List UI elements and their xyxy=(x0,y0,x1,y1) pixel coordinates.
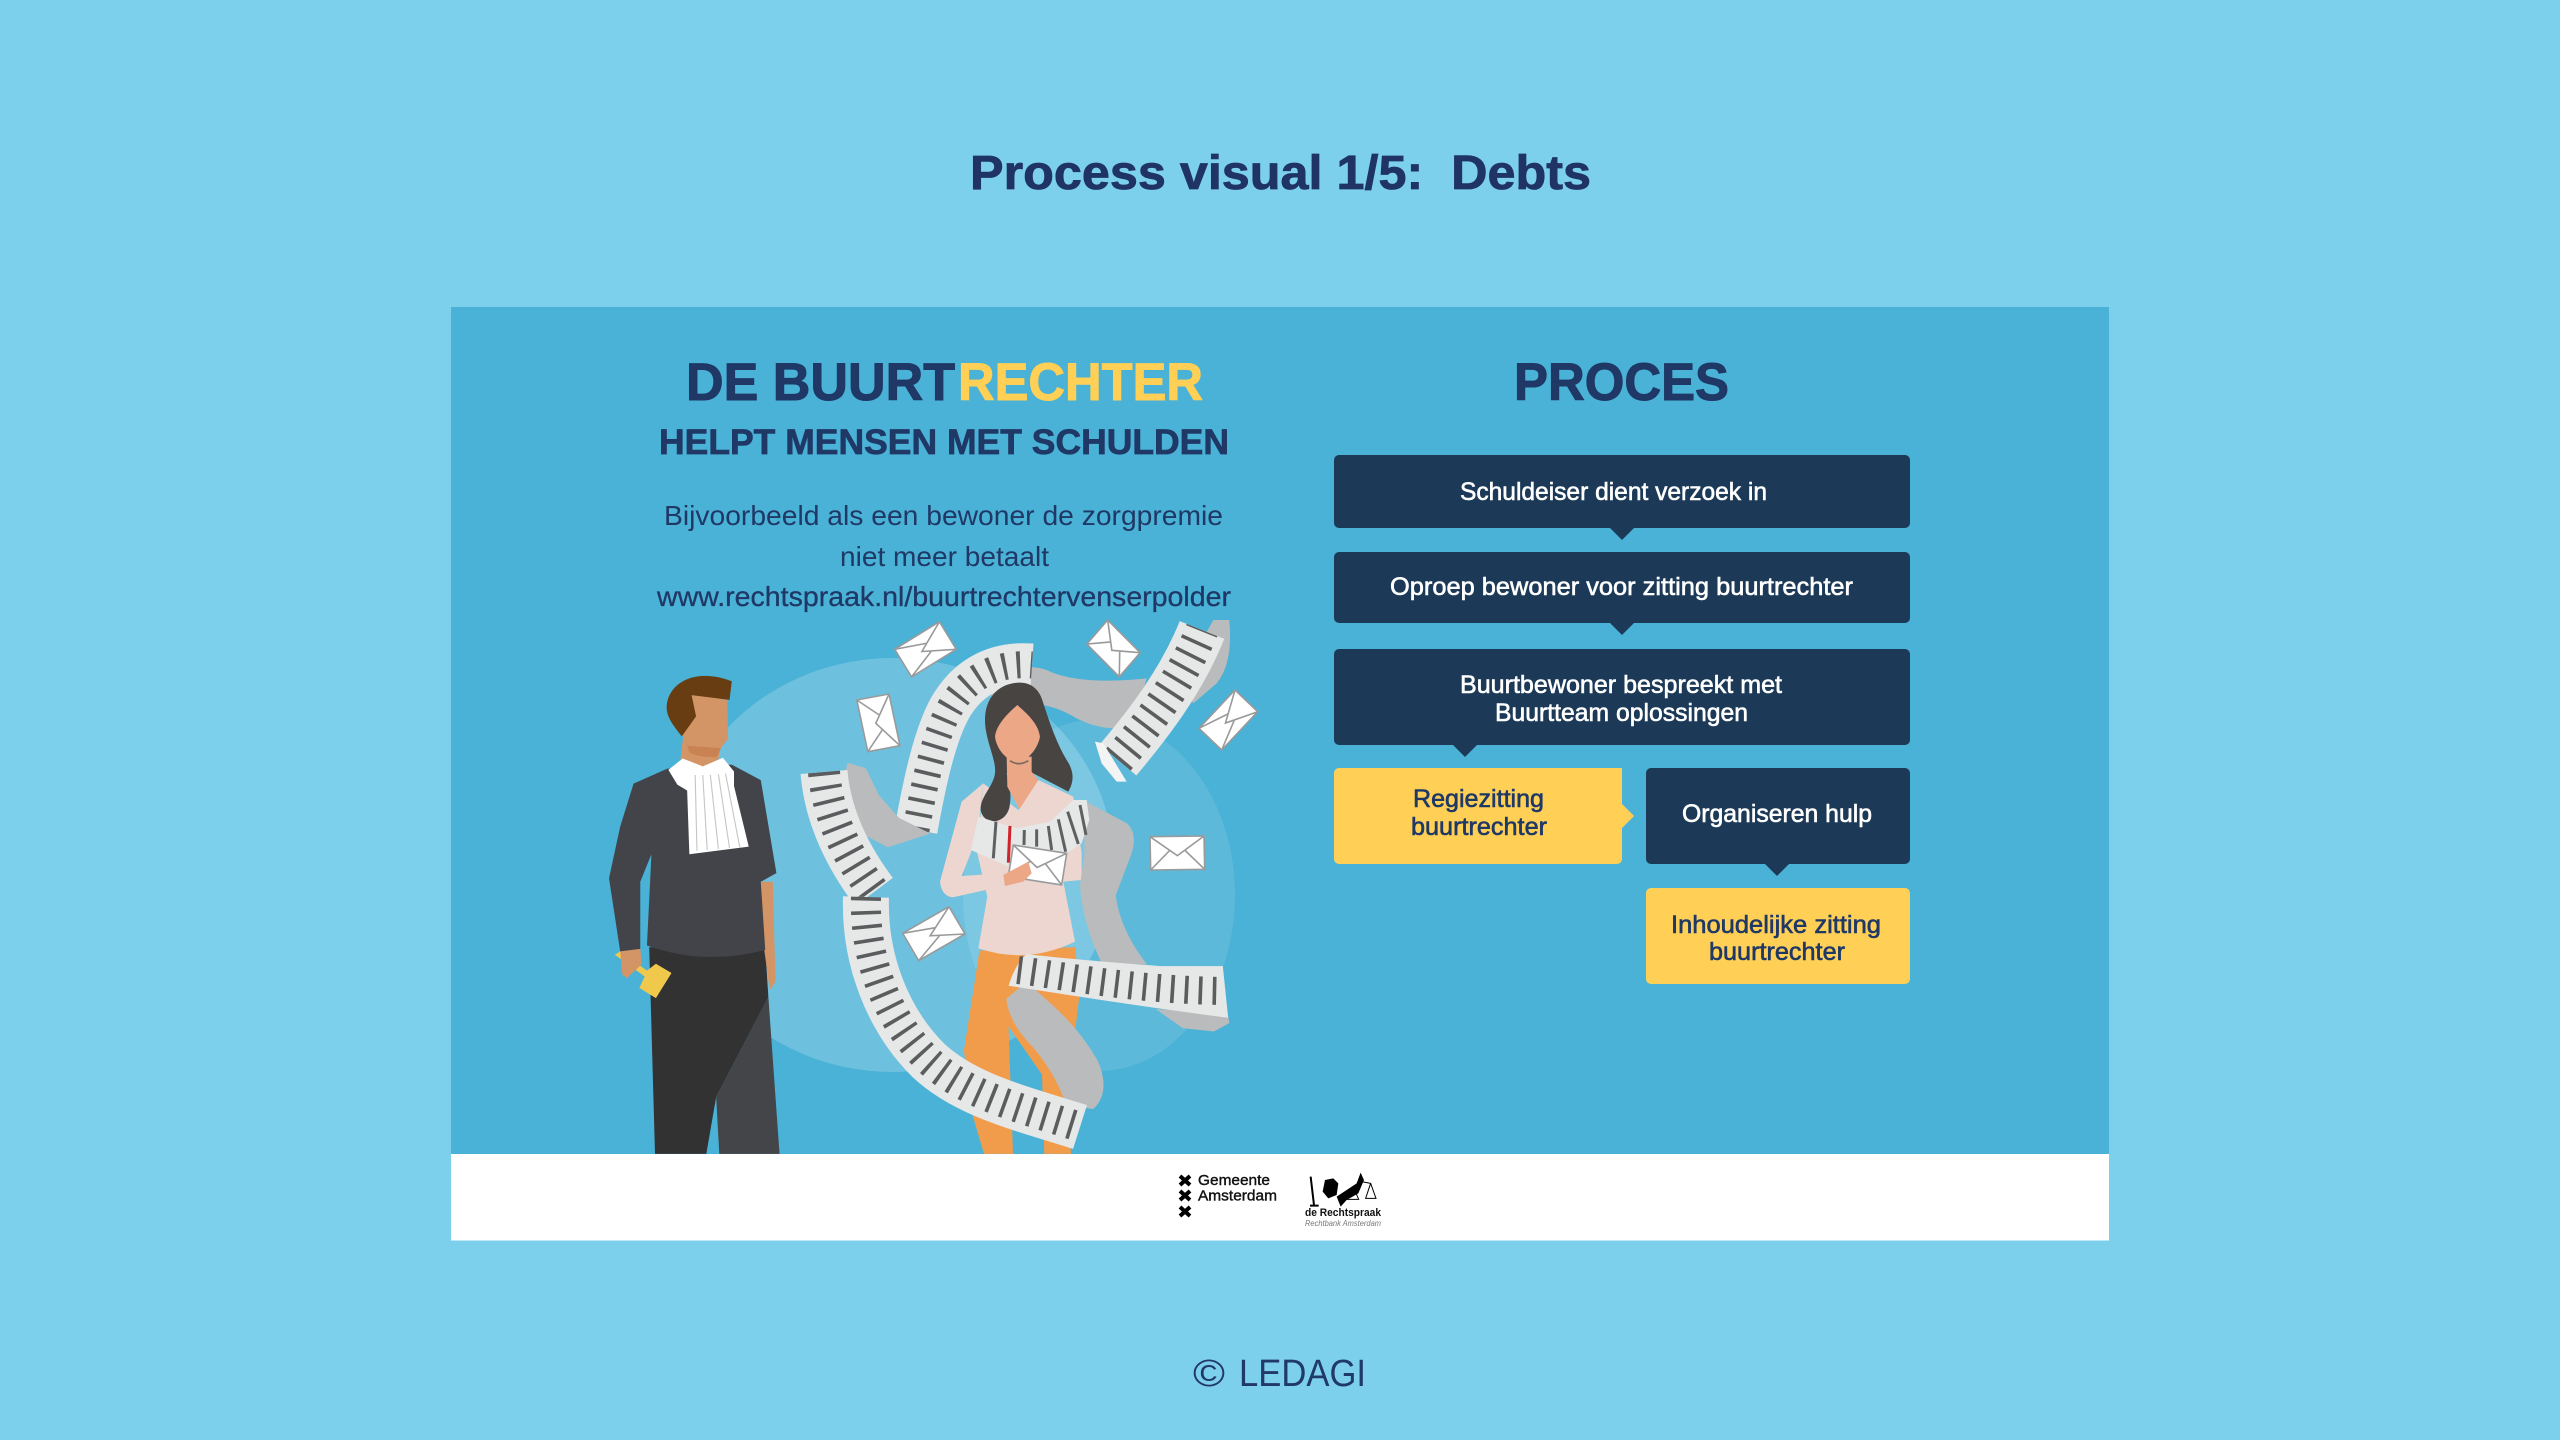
heading: proces: PROCES xyxy=(1514,353,1729,412)
illustration: woman xyxy=(940,683,1082,1154)
copyright footer: © xyxy=(1193,1353,1225,1395)
intro text: Bijvoorbeeld als een bewoner de zorgpremie xyxy=(664,500,1223,531)
step: regiezitting xyxy=(1334,768,1634,864)
panel: main poster xyxy=(451,307,2109,1395)
intro text: www.rechtspraak.nl/buurtrechtervenserpolder xyxy=(656,581,1231,612)
illustration: paper scroll in front of woman xyxy=(866,800,1230,1127)
illustration background circles xyxy=(672,658,1235,1072)
step: regiezitting: Regiezitting xyxy=(1413,785,1544,813)
subheading: HELPT MENSEN MET SCHULDEN xyxy=(659,423,1229,462)
illustration: flying envelopes xyxy=(857,620,1258,961)
title: Process visual 1/5: Debts xyxy=(970,147,1591,200)
heading: de buurtrechter xyxy=(686,353,1203,412)
step: buurtbewoner xyxy=(1334,649,1910,757)
logo: gemeente amsterdam xyxy=(1180,1172,1277,1216)
illustration: judge xyxy=(609,676,780,1154)
logo: gemeente amsterdam: Amsterdam xyxy=(1198,1188,1277,1204)
heading: de buurtrechter: RECHTER xyxy=(958,353,1203,412)
intro text: niet meer betaalt xyxy=(840,541,1049,572)
logo: gemeente amsterdam: Gemeente xyxy=(1198,1172,1270,1189)
step: inhoudelijke zitting xyxy=(1646,888,1910,984)
step: schuldeiser: Schuldeiser dient verzoek in xyxy=(1460,478,1767,506)
step: regiezitting: buurtrechter xyxy=(1411,813,1547,841)
step: inhoudelijke zitting: buurtrechter xyxy=(1709,938,1845,966)
step: organiseren hulp xyxy=(1646,768,1910,876)
logo: de rechtspraak: Rechtbank Amsterdam xyxy=(1305,1218,1381,1228)
process flowchart xyxy=(1334,455,1910,984)
intro text xyxy=(656,500,1231,612)
step: oproep xyxy=(1334,552,1910,635)
step: oproep: Oproep bewoner voor zitting buurtrechter xyxy=(1390,573,1853,601)
heading: de buurtrechter: DE BUURT xyxy=(686,353,955,412)
step: schuldeiser xyxy=(1334,455,1910,540)
logo: de rechtspraak: de Rechtspraak xyxy=(1305,1207,1382,1219)
footer band with logos xyxy=(451,1154,2109,1240)
step: inhoudelijke zitting: Inhoudelijke zitting xyxy=(1671,911,1881,939)
illustration: paper scroll behind woman xyxy=(824,620,1230,892)
copyright footer: LEDAGI xyxy=(1239,1353,1366,1395)
copyright footer xyxy=(1193,1353,1366,1395)
step: buurtbewoner: Buurtbewoner bespreekt met xyxy=(1460,671,1782,699)
step: buurtbewoner: Buurtteam oplossingen xyxy=(1495,699,1748,727)
step: organiseren hulp: Organiseren hulp xyxy=(1682,800,1872,828)
logo: de rechtspraak xyxy=(1305,1173,1382,1228)
